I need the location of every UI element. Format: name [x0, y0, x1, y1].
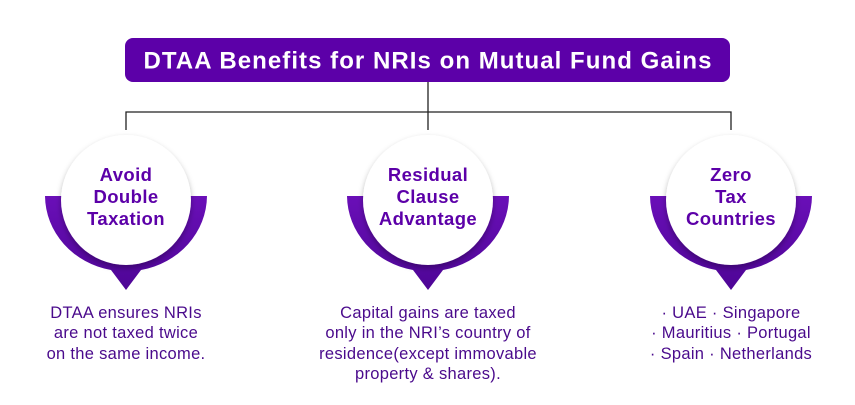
text: residual clause: Capital gains are taxed	[340, 304, 516, 322]
badge: residual clause advantage: Advantage	[379, 208, 477, 229]
text: residual clause: only in the NRI’s country of	[325, 324, 531, 342]
badge: zero tax countries: Zero	[710, 164, 752, 185]
badge: zero tax countries	[650, 135, 812, 290]
badge: zero tax countries: Tax	[715, 186, 747, 207]
connector lines	[126, 82, 731, 130]
title: DTAA Benefits for NRIs on Mutual Fund Gains	[144, 48, 712, 74]
text: residual clause: residence(except immovable	[319, 345, 537, 363]
text: residual clause: property & shares).	[355, 365, 501, 383]
text: avoid double taxation: are not taxed twice	[54, 324, 198, 342]
badge: avoid double taxation: Double	[93, 186, 159, 207]
badge: avoid double taxation: Taxation	[87, 208, 165, 229]
badge: avoid double taxation	[45, 135, 207, 290]
text: countries list: · Spain · Netherlands	[650, 345, 812, 363]
text: avoid double taxation: DTAA ensures NRIs	[50, 304, 202, 322]
panel: avoid double taxation	[45, 135, 207, 363]
badge: residual clause advantage: Clause	[396, 186, 460, 207]
text: countries list: · Mauritius · Portugal	[651, 324, 811, 342]
title	[125, 38, 730, 82]
badge: residual clause advantage	[347, 135, 509, 290]
panel: zero tax countries	[650, 135, 812, 363]
badge: avoid double taxation: Avoid	[100, 164, 152, 185]
badge: zero tax countries: Countries	[686, 208, 776, 229]
text: countries list: · UAE · Singapore	[662, 304, 800, 322]
panel: residual clause	[319, 135, 537, 383]
badge: residual clause advantage: Residual	[388, 164, 468, 185]
text: avoid double taxation: on the same income.	[47, 345, 205, 363]
